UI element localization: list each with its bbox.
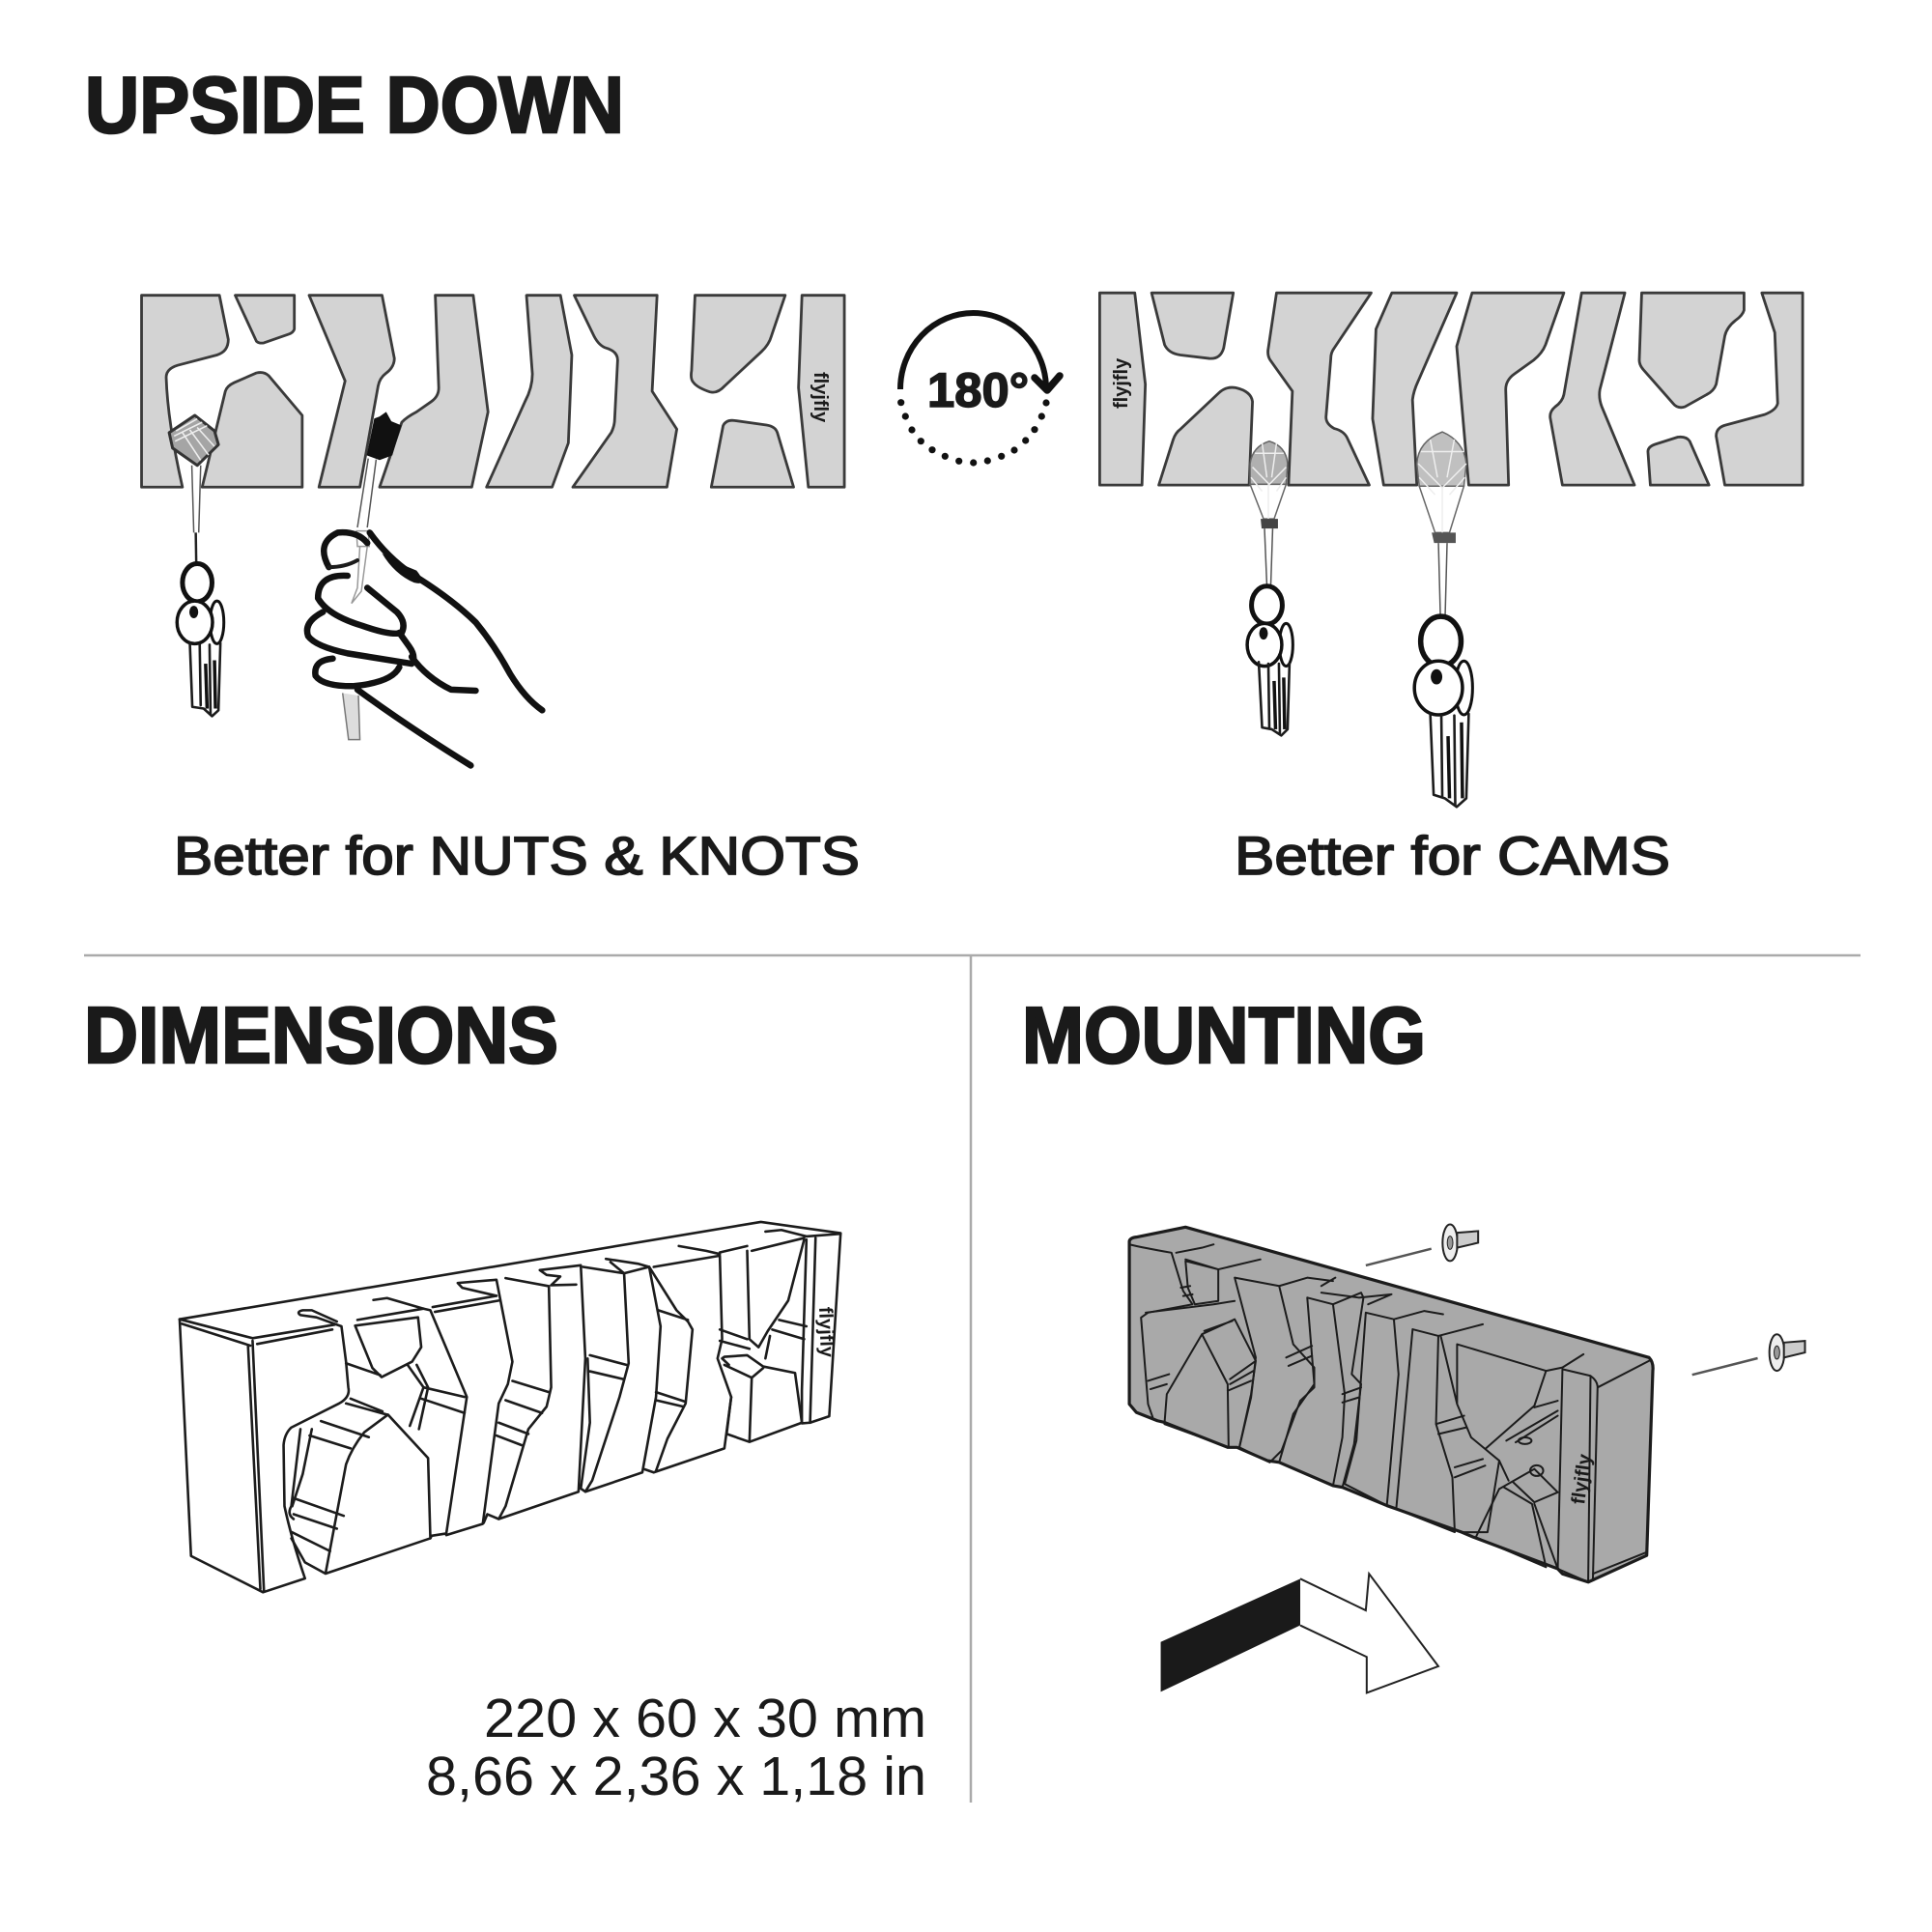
hand pulling knotted cord: [307, 412, 542, 765]
right panel: holder with cams: [1099, 293, 1803, 807]
title: upside down: UPSIDE DOWN: [85, 60, 624, 150]
mounting screw upper: [1366, 1225, 1478, 1265]
rotate 180 degrees icon: [897, 313, 1060, 467]
caption: better for cams: Better for CAMS: [1235, 825, 1670, 886]
small cam with keys: [1247, 441, 1293, 735]
large cam with keys: [1414, 432, 1472, 807]
logo on right bar: flyjfly: [1111, 357, 1132, 409]
isometric back of holder in gray: [1129, 1227, 1653, 1582]
dimensions in millimetres: 220 x 60 x 30 mm: [484, 1688, 926, 1749]
mounting screw lower: [1692, 1334, 1805, 1375]
left panel: holder with nut and knot: [142, 296, 844, 765]
heading: dimensions: DIMENSIONS: [84, 990, 558, 1080]
isometric line drawing of holder front: [180, 1222, 840, 1592]
nut on key chain: [169, 415, 224, 716]
caption: better for nuts and knots: Better for NUTS & KNOTS: [174, 825, 860, 886]
logo on left bar: flyjfly: [810, 372, 831, 423]
holder bar: rotated orientation: [1099, 293, 1803, 485]
logo on gray holder: flyjfly: [1568, 1452, 1596, 1506]
arrow: adhesive strip pointing to holder: [1161, 1574, 1438, 1692]
logo on isometric holder: flyjfly: [814, 1306, 838, 1358]
rotate 180 degrees icon: 180°: [927, 363, 1029, 417]
dimensions in inches: 8,66 x 2,36 x 1,18 in: [426, 1746, 926, 1807]
holder bar: left orientation: [142, 296, 844, 487]
heading: mounting: MOUNTING: [1022, 990, 1426, 1080]
